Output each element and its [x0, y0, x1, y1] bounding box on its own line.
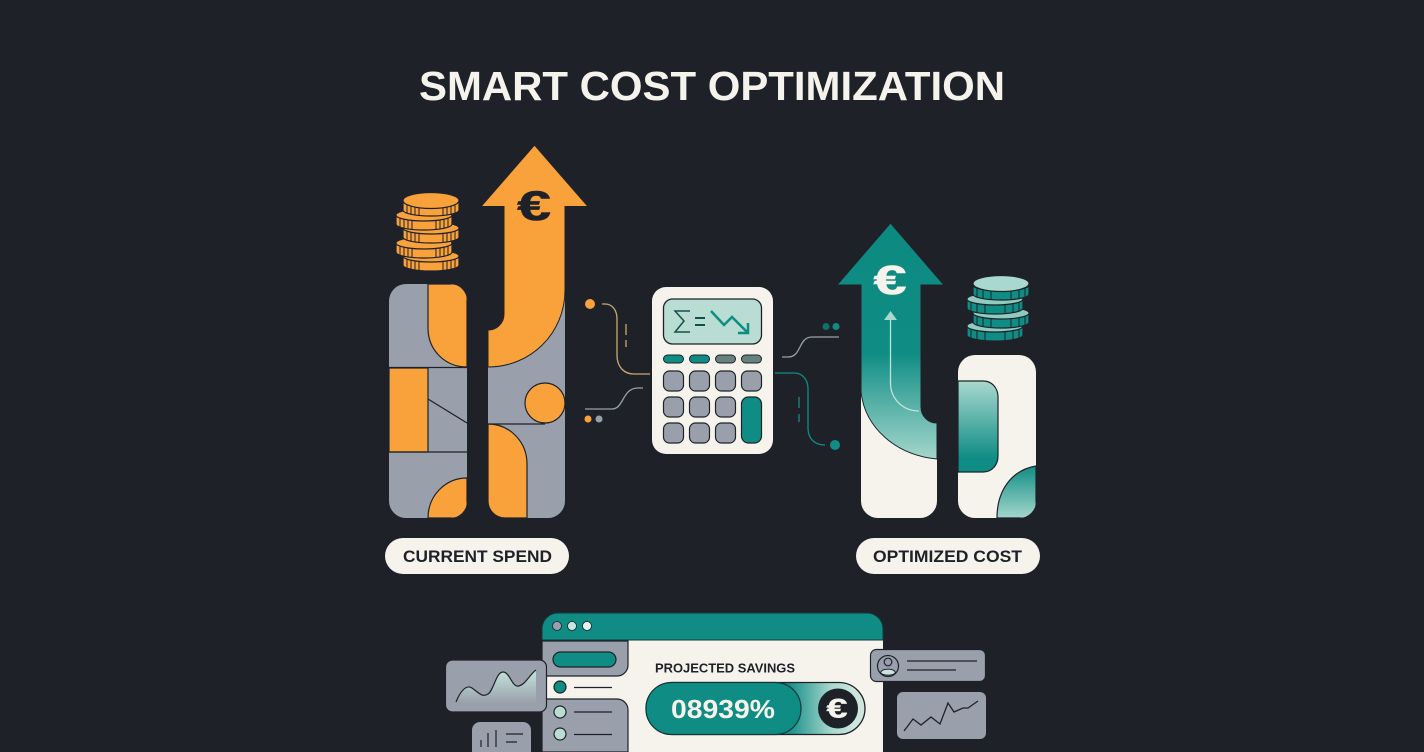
panel: optimized cost: [837, 223, 1040, 574]
sidebar: [542, 641, 628, 752]
calculator: [652, 287, 773, 454]
label: current spend: CURRENT SPEND: [403, 548, 552, 566]
icon: euro on orange arrow: €: [517, 183, 551, 230]
label: optimized cost: [856, 538, 1040, 574]
calculator keypad: [664, 371, 762, 443]
savings meter: [646, 682, 865, 734]
icon: euro on teal arrow: €: [873, 257, 907, 303]
icon: teal coin stack: [967, 276, 1029, 341]
card: area chart: [446, 660, 546, 712]
label: current spend: [385, 538, 569, 574]
small rising arrow: [884, 311, 919, 411]
savings meter: €: [826, 693, 848, 723]
arrow: teal optimized cost: [837, 223, 944, 459]
bar: optimized cost right: [958, 355, 1036, 518]
label: optimized cost: OPTIMIZED COST: [873, 548, 1022, 566]
arrow: rising orange cost: [481, 145, 588, 367]
bar: current spend left: [389, 284, 467, 518]
calculator function keys: [664, 355, 762, 363]
connectors: left: [584, 299, 650, 422]
bar: current spend right: [488, 290, 565, 518]
projected savings heading: PROJECTED SAVINGS: [655, 660, 795, 676]
card: small bars: [472, 722, 531, 752]
savings meter: 08939%: [671, 694, 775, 724]
title: SMART COST OPTIMIZATION: [419, 63, 1005, 109]
icon: orange coin stack: [396, 192, 459, 271]
card: line chart: [897, 692, 986, 739]
calculator screen: [664, 299, 762, 344]
card: user profile: [870, 650, 986, 682]
dashboard window: [542, 613, 883, 752]
connectors: right: [775, 323, 840, 450]
panel: current spend: [385, 145, 588, 574]
window header: [542, 613, 883, 640]
bar: optimized cost left: [861, 385, 937, 518]
